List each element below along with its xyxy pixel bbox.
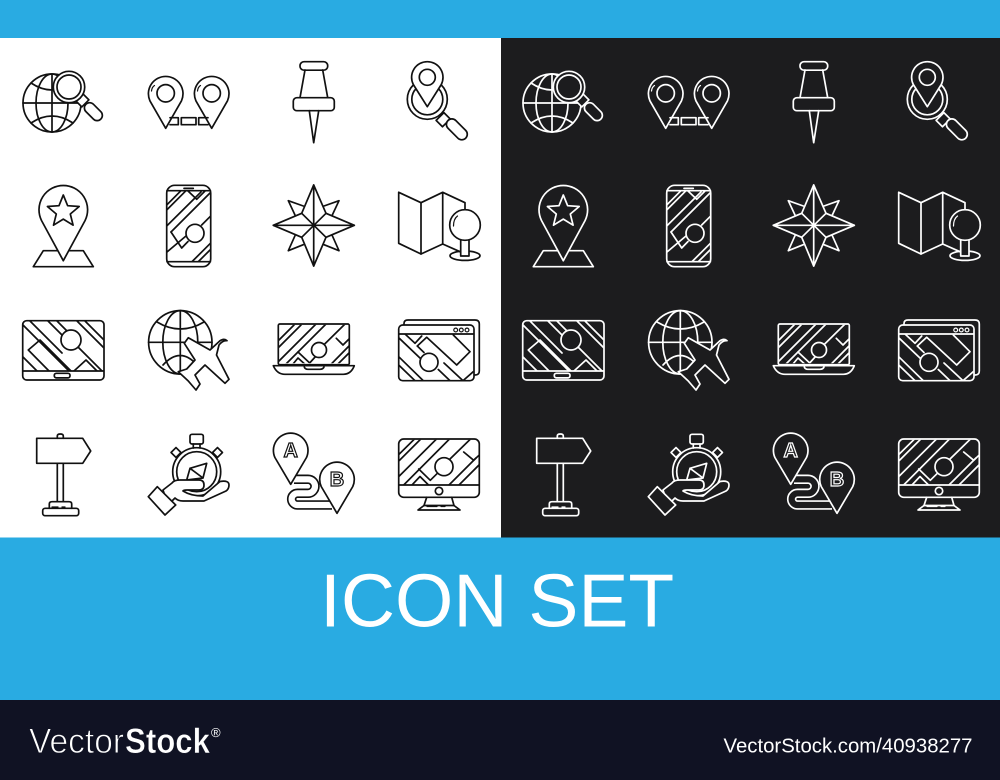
icon: folded map with pin	[899, 192, 980, 260]
icon: route from A to B: A	[783, 440, 798, 462]
icon: pin in magnifier	[907, 62, 970, 142]
icon: route from A to B: A	[283, 440, 298, 462]
icon: laptop map	[273, 324, 354, 374]
icon: pin in magnifier	[407, 62, 470, 142]
icon: browser map	[899, 320, 979, 381]
icon: laptop map	[773, 324, 854, 374]
footer logo: ®	[211, 725, 221, 740]
icon: globe search	[523, 71, 605, 132]
icon: hand with compass	[648, 434, 729, 515]
icon: route from A to B: B	[830, 469, 844, 491]
title: ICON SET	[320, 559, 674, 643]
icon: hand with compass	[148, 434, 229, 515]
footer logo: Stock	[125, 722, 210, 761]
icon: route from A to B	[773, 433, 854, 513]
panel: white icon grid	[0, 38, 501, 538]
icon: push pin	[793, 62, 834, 143]
banner: blue title band	[0, 538, 1000, 700]
footer bar	[0, 700, 1000, 780]
icon: compass rose	[773, 185, 854, 266]
icon: signpost	[37, 434, 91, 516]
top blue band	[0, 0, 1000, 38]
panel: dark icon grid	[501, 38, 1000, 538]
icon: folded map with pin	[399, 192, 480, 260]
icon: signpost	[537, 434, 591, 516]
icon: tablet map	[523, 321, 604, 380]
footer image id: VectorStock.com/40938277	[724, 736, 972, 758]
icon: globe and plane	[149, 311, 229, 390]
icon: tablet map	[23, 321, 104, 380]
icon: route from A to B: B	[330, 469, 344, 491]
icon: two location pins	[148, 76, 229, 128]
footer logo	[29, 722, 221, 761]
icon: phone map	[167, 185, 211, 267]
icon: star pin on map	[533, 185, 593, 267]
icon: browser map	[399, 320, 479, 381]
icon: push pin	[293, 62, 334, 143]
icon: globe and plane	[649, 311, 729, 390]
icon: compass rose	[273, 185, 354, 266]
icon: monitor map	[399, 439, 480, 510]
icon: phone map	[667, 185, 711, 267]
icon: globe search	[23, 71, 105, 132]
icon: route from A to B	[273, 433, 354, 513]
footer logo: Vector	[29, 722, 124, 761]
icon: monitor map	[899, 439, 980, 510]
icon: two location pins	[648, 76, 729, 128]
icon: star pin on map	[33, 185, 93, 267]
